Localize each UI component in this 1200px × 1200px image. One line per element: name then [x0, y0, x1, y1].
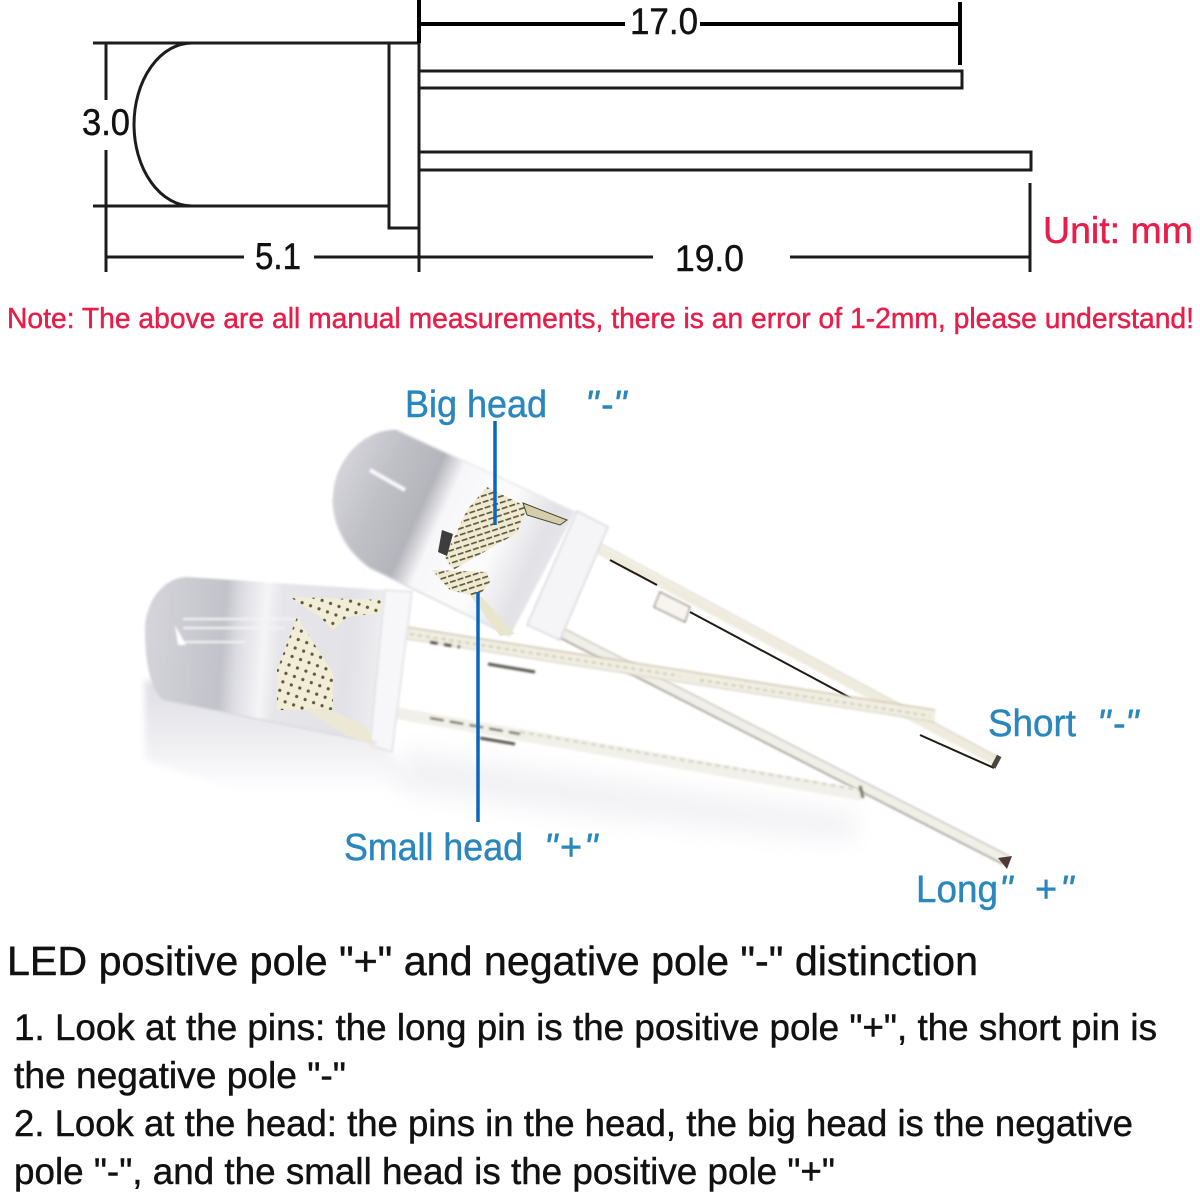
polarity instructions: pole "-", and the small head is the positive pole "+"	[14, 1151, 835, 1192]
unit label: Unit: mm	[1043, 210, 1193, 251]
label: 3.0: 3.0	[82, 102, 130, 143]
heading: LED positive pole "+" and negative pole "-" distinction	[7, 938, 978, 984]
label: short pin	[988, 703, 1140, 745]
label: big head: Big head	[405, 384, 547, 426]
polarity instructions	[14, 1007, 1157, 1192]
front LED pins	[390, 626, 935, 798]
measurement note: Note: The above are all manual measurements, there is an error of 1-2mm, please understand!	[7, 303, 1194, 335]
label: big head: "	[613, 384, 628, 426]
label: small head: Small head	[344, 827, 523, 869]
label: 17.0: 17.0	[630, 1, 698, 42]
label: 19.0: 19.0	[675, 238, 744, 279]
polarity instructions: the negative pole "-"	[14, 1055, 346, 1096]
long pin	[419, 152, 1031, 170]
front LED body	[145, 577, 412, 752]
label: big head: "	[585, 384, 600, 426]
3.0 dimension line	[104, 43, 108, 272]
front LED lead frame	[277, 597, 383, 745]
soft ground shadow	[145, 680, 860, 840]
label: long pin	[916, 869, 1075, 911]
label: small head: "	[544, 827, 559, 869]
label: big head	[405, 384, 628, 426]
LED body outline	[93, 43, 419, 272]
label: long pin: "	[1060, 869, 1075, 911]
pointer: big head	[493, 421, 497, 525]
label: long pin: +	[1035, 869, 1057, 911]
label: short pin: "	[1125, 703, 1140, 745]
label: 5.1: 5.1	[255, 236, 301, 277]
label: long pin: "	[999, 869, 1014, 911]
polarity instructions: 1. Look at the pins: the long pin is the positive pole "+", the short pin is	[14, 1007, 1157, 1048]
label: short pin: "	[1097, 703, 1112, 745]
pointer: small head	[476, 592, 480, 822]
label: short pin: -	[1113, 703, 1126, 745]
back LED pins	[537, 536, 1012, 869]
short pin	[419, 71, 962, 88]
label: short pin: Short	[988, 703, 1076, 745]
label: long pin: Long	[916, 869, 998, 911]
17.0 dimension line	[419, 0, 960, 65]
back LED lead frame	[432, 487, 567, 636]
polarity instructions: 2. Look at the head: the pins in the head, the big head is the negative	[14, 1103, 1133, 1144]
back LED body	[333, 430, 608, 640]
5.1 and 19.0 dimension line	[106, 183, 1030, 272]
dimension drawing	[93, 0, 1031, 272]
label: small head: +	[560, 827, 582, 869]
LED photo	[145, 430, 1012, 869]
label: big head: -	[601, 384, 614, 426]
label: small head: "	[584, 827, 599, 869]
